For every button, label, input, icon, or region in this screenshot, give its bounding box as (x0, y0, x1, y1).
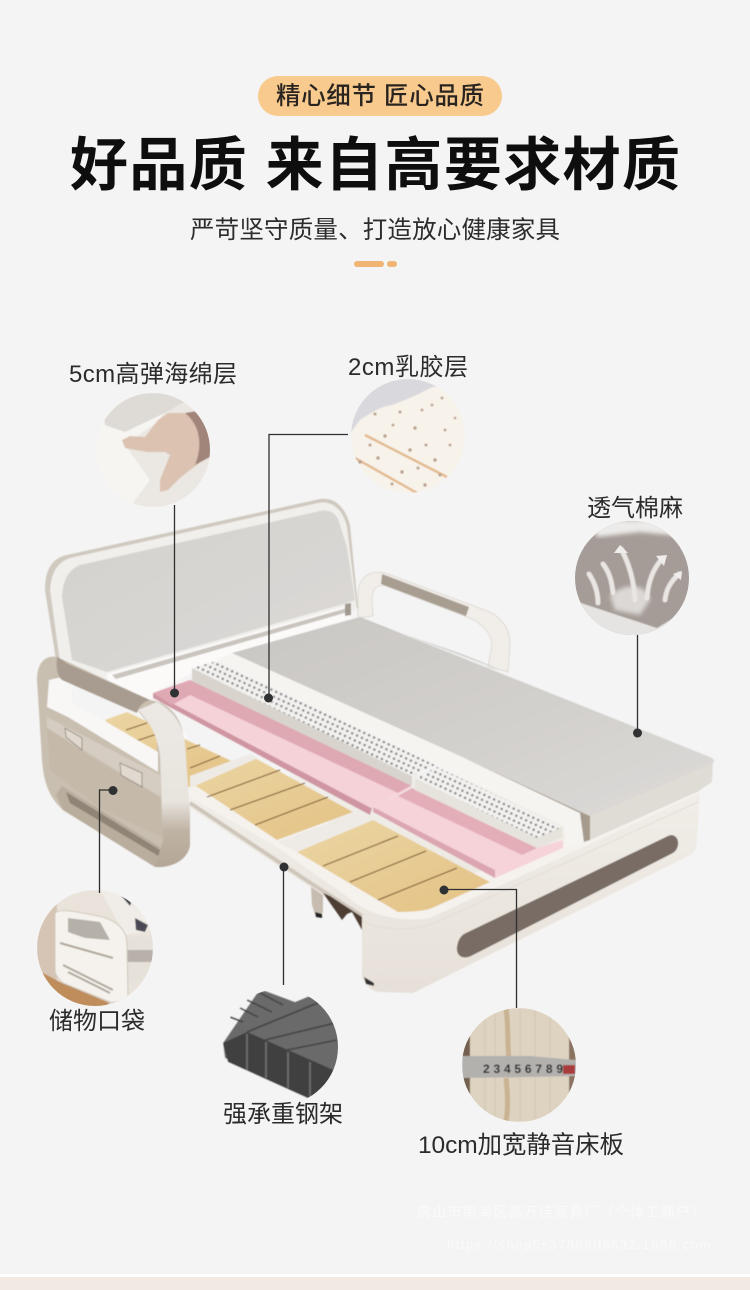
white base behind mattress (107, 606, 358, 740)
legs and steel support (311, 887, 374, 986)
callout: foam layer (170, 505, 179, 698)
circle photo: wood board with tape measure (462, 1008, 576, 1122)
mattress (232, 617, 714, 842)
badge: 精心细节 匠心品质: 精心细节 匠心品质 (276, 82, 484, 110)
bed frame body (190, 770, 700, 993)
circle photo: breathable cotton linen (574, 520, 690, 640)
left armrest with storage pocket (37, 657, 190, 867)
white cover strip (217, 653, 584, 847)
pink foam layer (153, 680, 563, 878)
circle photo: wood board with tape measure: 23456789 (483, 1062, 563, 1076)
callout: pocket (100, 786, 118, 893)
backrest cushion (62, 510, 355, 672)
right armrest (345, 572, 510, 672)
label: 2cm乳胶层: 2cm乳胶层 (348, 354, 468, 381)
callout: fabric (633, 635, 642, 738)
title: 好品质 来自高要求材质 (70, 133, 680, 198)
watermark (417, 1204, 710, 1252)
circle photo: latex (351, 379, 465, 493)
backrest frame (45, 499, 358, 680)
label: 透气棉麻: 透气棉麻 (587, 495, 683, 522)
callout: latex layer (264, 434, 348, 702)
watermark: 佛山市南海区鑫万佳家具厂（个体工商户） (417, 1204, 705, 1220)
accent dashes (354, 261, 397, 267)
sofa bed illustration (37, 499, 714, 993)
circle photo: storage pocket (37, 890, 153, 1010)
label: 强承重钢架: 强承重钢架 (223, 1101, 343, 1128)
label: 10cm加宽静音床板: 10cm加宽静音床板 (418, 1131, 624, 1159)
callout: steel frame (280, 862, 288, 985)
subtitle: 严苛坚守质量、打造放心健康家具 (190, 216, 560, 244)
label: 储物口袋: 储物口袋 (49, 1008, 145, 1035)
badge: 精心细节 匠心品质 (258, 76, 502, 116)
circle photo: steel frame (222, 989, 340, 1105)
callout: wood board (440, 886, 516, 1008)
circle photo: foam with hand (96, 393, 212, 507)
label: 5cm高弹海绵层: 5cm高弹海绵层 (69, 361, 237, 388)
back rail (112, 608, 348, 679)
bottom band (0, 1274, 750, 1290)
wood slats (105, 712, 490, 912)
watermark: https://shop5s37809tl6632.1688.com (447, 1238, 710, 1252)
latex layer (192, 661, 562, 848)
grey side handle (457, 835, 678, 957)
